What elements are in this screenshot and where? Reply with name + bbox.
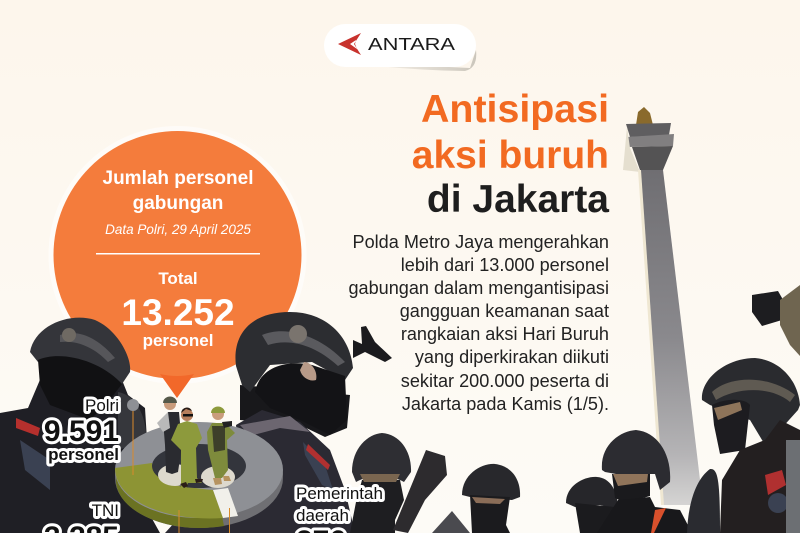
soldier group: right centre <box>566 430 692 533</box>
soldier group: mid <box>350 433 520 533</box>
label: Polri: personel <box>48 445 119 464</box>
label: Polri: Polri <box>85 396 119 415</box>
callout: total personnel: Jumlah personel <box>102 168 254 189</box>
label: TNI: TNI <box>92 501 119 520</box>
label: Pemerintah daerah: Pemerintah <box>296 484 383 503</box>
callout: total personnel: 13.252 <box>121 292 235 333</box>
body text <box>348 232 609 414</box>
title: di Jakarta <box>427 178 609 221</box>
body text: Polda Metro Jaya mengerahkan <box>353 232 609 252</box>
body text: lebih dari 13.000 personel <box>401 255 609 275</box>
soldier: far right <box>687 285 800 533</box>
title: Antisipasi <box>421 88 609 131</box>
monument <box>623 107 703 505</box>
icon: personnel figures <box>157 397 235 488</box>
label: Polri <box>44 396 119 464</box>
donut chart <box>115 399 283 533</box>
soldier: far left <box>0 318 160 533</box>
title: aksi buruh <box>412 134 609 177</box>
callout: total personnel: Data Polri, 29 April 2025 <box>105 222 251 237</box>
callout: total personnel: Total <box>158 269 198 288</box>
body text: Jakarta pada Kamis (1/5). <box>402 394 609 414</box>
label: Pemerintah daerah <box>296 484 383 533</box>
label: Polri: 9.591 <box>44 415 119 448</box>
body text: sekitar 200.000 peserta di <box>401 371 609 391</box>
label: TNI <box>44 501 119 533</box>
callout: total personnel: personel <box>143 331 213 350</box>
logo: ANTARA: ANTARA <box>368 34 455 54</box>
body text: gabungan dalam mengantisipasi <box>348 278 609 298</box>
logo: ANTARA <box>324 24 476 71</box>
callout: total personnel: gabungan <box>133 193 223 214</box>
title <box>412 88 609 221</box>
body text: gangguan keamanan saat <box>400 301 609 321</box>
callout: total personnel <box>48 126 306 398</box>
body text: rangkaian aksi Hari Buruh <box>401 324 609 344</box>
soldier: centre <box>165 312 392 533</box>
body text: yang diperkirakan diikuti <box>415 347 609 367</box>
label: Pemerintah daerah: daerah <box>296 506 349 525</box>
